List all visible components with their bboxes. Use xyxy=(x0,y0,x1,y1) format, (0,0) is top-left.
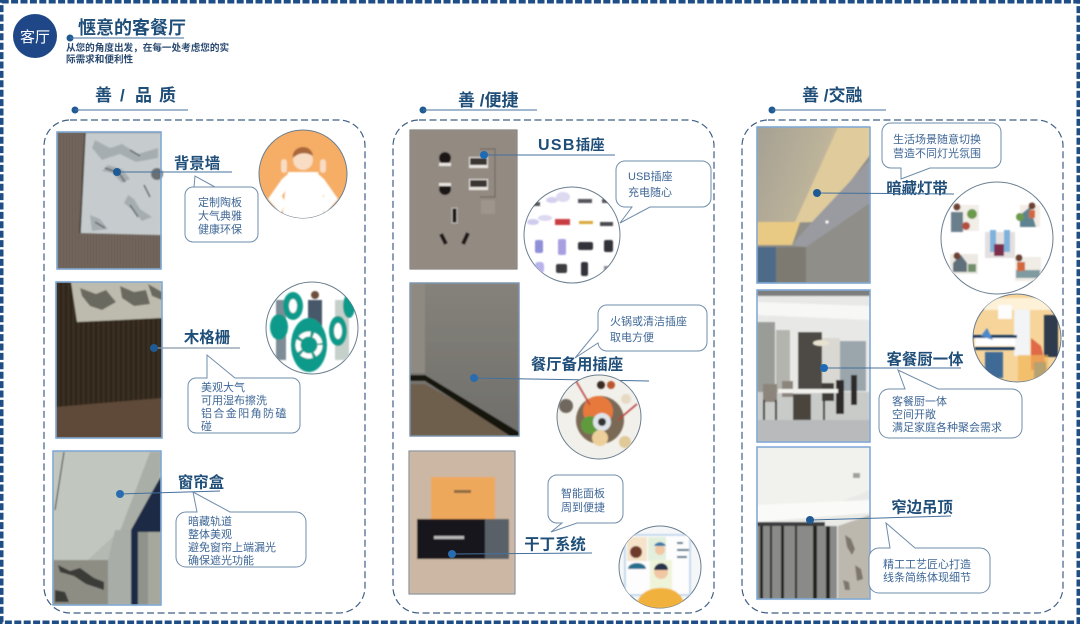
callout: curtain box: 整体美观 xyxy=(188,527,232,541)
callout: spare socket: 取电方便 xyxy=(610,330,654,344)
callout: hidden light strip: 营造不同灯光氛围 xyxy=(893,146,981,160)
heading: quality: 善 xyxy=(95,86,112,105)
callout: smart panel: 智能面板 xyxy=(561,486,605,500)
photo: spare socket xyxy=(410,283,519,436)
callout: smart panel: 周到便捷 xyxy=(561,500,605,514)
label: spare socket: 餐厅备用插座 xyxy=(531,354,623,374)
subtitle xyxy=(66,42,229,66)
label: narrow-edge ceiling: 窄边吊顶 xyxy=(891,498,953,516)
label: feature wall: 背景墙 xyxy=(174,154,220,172)
label: USB socket xyxy=(480,136,615,159)
panel frame: quality xyxy=(44,120,365,613)
photo: narrow-edge ceiling xyxy=(757,447,870,599)
callout: feature wall xyxy=(185,176,258,242)
callout: curtain box: 确保遮光功能 xyxy=(188,553,254,567)
icon: kitchen xyxy=(973,294,1061,382)
callout: open-plan dining: 客餐厨一体 xyxy=(892,394,947,408)
callout: wood grille: 碰 xyxy=(201,420,212,433)
subtitle: 从您的角度出发，在每一处考虑您的实 xyxy=(66,42,229,54)
callout: curtain box: 避免窗帘上端漏光 xyxy=(188,540,276,554)
photo: wood grille xyxy=(56,282,162,438)
callout: hidden light strip: 生活场景随意切换 xyxy=(893,132,981,146)
photo: smart panel xyxy=(409,451,515,594)
icon: USB accessories xyxy=(524,187,620,283)
label: hidden light strip: 暗藏灯带 xyxy=(886,180,948,198)
callout: smart panel xyxy=(548,475,623,532)
label: spare socket xyxy=(470,354,649,382)
heading: quality: 质 xyxy=(159,85,176,105)
label: curtain box xyxy=(116,472,225,498)
callout: feature wall: 定制陶板 xyxy=(198,195,242,209)
label: open-plan dining: 客餐厨一体 xyxy=(887,350,964,368)
callout: open-plan dining: 空间开敞 xyxy=(892,407,936,421)
callout: spare socket xyxy=(575,305,707,358)
callout: hidden light strip xyxy=(882,123,1001,179)
label: wood grille: 木格栅 xyxy=(184,328,230,346)
heading: convenience xyxy=(420,91,537,114)
room badge xyxy=(13,14,57,58)
panel frame: convenience xyxy=(393,120,714,613)
callout: curtain box xyxy=(176,492,306,567)
heading: integration xyxy=(768,85,886,114)
photo: USB socket xyxy=(410,130,517,269)
label: curtain box: 窗帘盒 xyxy=(178,472,225,492)
icon: recycling people xyxy=(266,282,358,374)
heading: quality xyxy=(72,85,188,114)
icon: lifestyle scenes xyxy=(941,182,1053,294)
label: smart panel xyxy=(448,534,592,558)
callout: spare socket: 火锅或清洁插座 xyxy=(610,314,687,328)
callout: feature wall: 大气典雅 xyxy=(198,208,242,222)
callout: narrow-edge ceiling xyxy=(869,523,990,593)
panel frame: integration xyxy=(742,120,1063,613)
label: hidden light strip xyxy=(813,180,954,198)
heading: quality: / xyxy=(120,86,125,105)
callout: curtain box: 暗藏轨道 xyxy=(188,514,232,528)
label: wood grille xyxy=(150,328,240,352)
room badge: 客厅 xyxy=(20,29,50,46)
photo: hidden light strip xyxy=(757,127,870,283)
label: open-plan dining xyxy=(820,350,964,372)
callout: USB socket: 充电随心 xyxy=(628,185,672,199)
callout: open-plan dining xyxy=(879,370,1022,438)
callout: wood grille: 美观大气 xyxy=(201,380,245,394)
icon: thumbs-up man xyxy=(259,130,347,220)
panel: quality xyxy=(44,85,365,613)
callout: wood grille: 铝合金阳角防磕 xyxy=(201,406,288,420)
photo: open-plan dining xyxy=(757,290,870,442)
panel: convenience xyxy=(393,91,714,613)
callout: narrow-edge ceiling: 线条简练体现细节 xyxy=(883,570,971,584)
label: USB socket: USB插座 xyxy=(538,136,605,154)
title: 惬意的客餐厅 xyxy=(78,17,186,38)
label: narrow-edge ceiling xyxy=(806,498,953,524)
heading: convenience: 善 /便捷 xyxy=(458,91,518,110)
heading: integration: 善 /交融 xyxy=(802,85,862,105)
callout: wood grille xyxy=(188,355,300,433)
photo: curtain box xyxy=(53,451,161,605)
panel: integration xyxy=(742,85,1063,613)
icon: hotpot xyxy=(557,375,641,459)
callout: USB socket xyxy=(616,161,711,223)
callout: wood grille: 可用湿布擦洗 xyxy=(201,393,267,407)
label: feature wall xyxy=(113,154,232,176)
label: smart panel: 干丁系统 xyxy=(524,534,586,554)
callout: feature wall: 健康环保 xyxy=(198,222,242,236)
callout: narrow-edge ceiling: 精工工艺匠心打造 xyxy=(883,557,971,571)
callout: USB socket: USB插座 xyxy=(628,169,673,183)
icon: video call xyxy=(619,526,701,608)
heading: quality: 品 xyxy=(135,86,152,105)
photo: feature wall xyxy=(57,132,163,269)
subtitle: 际需求和便利性 xyxy=(66,54,134,66)
callout: open-plan dining: 满足家庭各种聚会需求 xyxy=(892,420,1002,434)
